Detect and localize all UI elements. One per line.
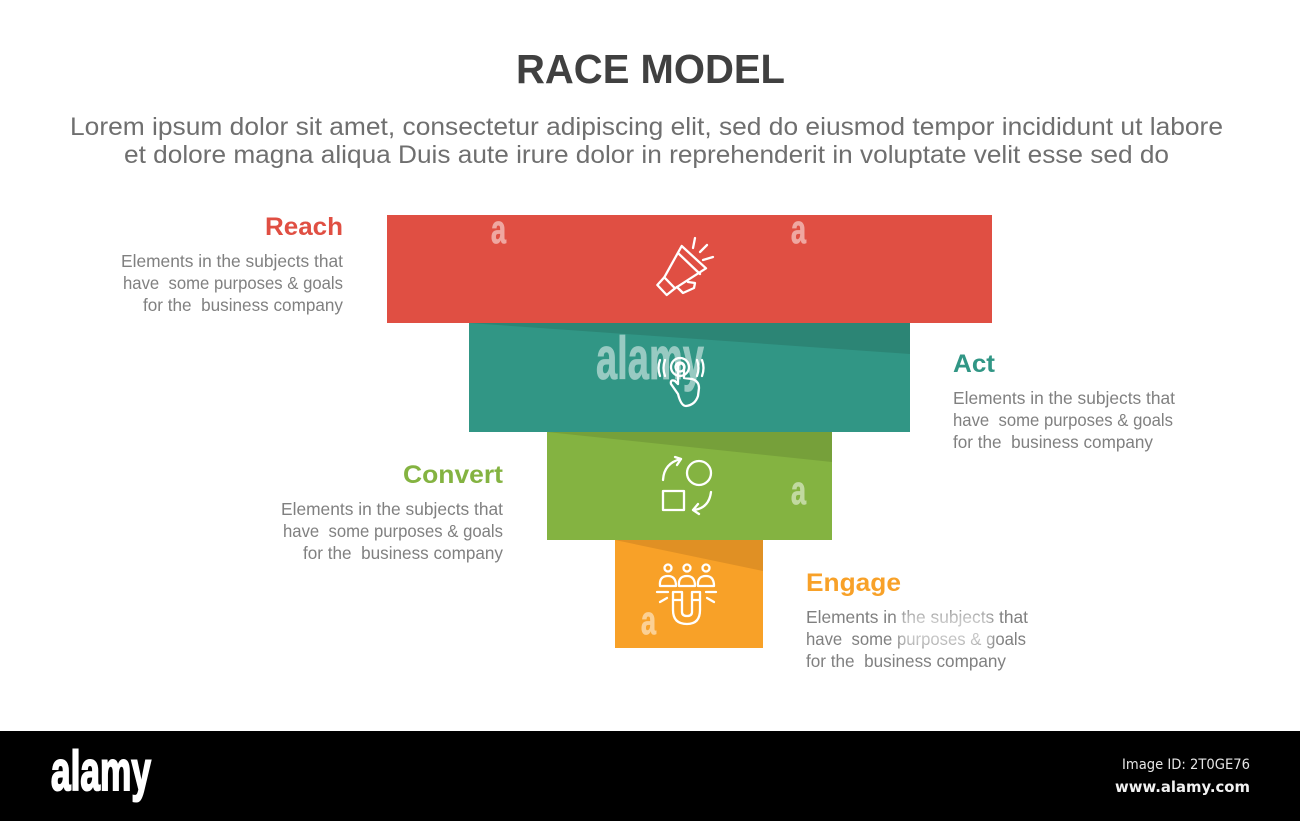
- panel: reach bar: [387, 215, 992, 323]
- website: www.alamy.com: [1115, 778, 1250, 796]
- label: convert: have some purposes & goals: [283, 521, 503, 541]
- icon: megaphone: [657, 238, 713, 295]
- label: reach: for the business company: [143, 295, 343, 315]
- footer logo: alamy: [51, 739, 151, 802]
- watermark haze over engage text: [900, 612, 992, 648]
- image id: Image ID: 2T0GE76: [1122, 757, 1250, 773]
- label: act: have some purposes & goals: [953, 410, 1173, 430]
- watermark fragments: a: [491, 208, 507, 252]
- label: engage: Engage: [806, 569, 901, 597]
- panel: convert bar: [547, 432, 832, 540]
- icon: people and magnet: [657, 564, 716, 624]
- label: reach: Elements in the subjects that: [121, 251, 343, 271]
- watermark fragments: a: [791, 208, 807, 252]
- panel: funnel: [387, 215, 992, 648]
- label: engage: [806, 569, 1028, 671]
- label: convert: [281, 461, 504, 563]
- title: RACE MODEL: [516, 46, 785, 92]
- label: convert: Elements in the subjects that: [281, 499, 503, 519]
- label: act: Elements in the subjects that: [953, 388, 1175, 408]
- panel: act bar: [469, 323, 910, 432]
- watermark fragments: [491, 208, 807, 643]
- watermark fragments: a: [641, 599, 657, 643]
- label: act: Act: [953, 350, 996, 378]
- label: reach: have some purposes & goals: [123, 273, 343, 293]
- subtitle text block: Lorem ipsum dolor sit amet, consectetur adipiscing elit, sed do eiusmod tempor incididunt ut labore: [70, 113, 1223, 141]
- footer: black watermark band: [0, 731, 1300, 821]
- label: reach: [121, 213, 343, 315]
- watermark fragments: a: [791, 469, 807, 513]
- label: engage: have some purposes & goals: [806, 629, 1026, 649]
- subtitle text block: et dolore magna aliqua Duis aute irure dolor in reprehenderit in voluptate velit esse sed do: [124, 141, 1169, 169]
- label: act: [953, 350, 1175, 452]
- label: act: for the business company: [953, 432, 1153, 452]
- watermark fragments: alamy: [596, 325, 704, 392]
- label: engage: Elements in the subjects that: [806, 607, 1028, 627]
- label: reach: Reach: [265, 213, 343, 241]
- label: engage: for the business company: [806, 651, 1006, 671]
- label: convert: Convert: [403, 461, 504, 489]
- panel: engage bar: [615, 540, 763, 648]
- label: convert: for the business company: [303, 543, 503, 563]
- subtitle text block: [70, 113, 1223, 169]
- icon: convert shapes: [663, 457, 711, 514]
- icon: touch hand: [658, 358, 704, 406]
